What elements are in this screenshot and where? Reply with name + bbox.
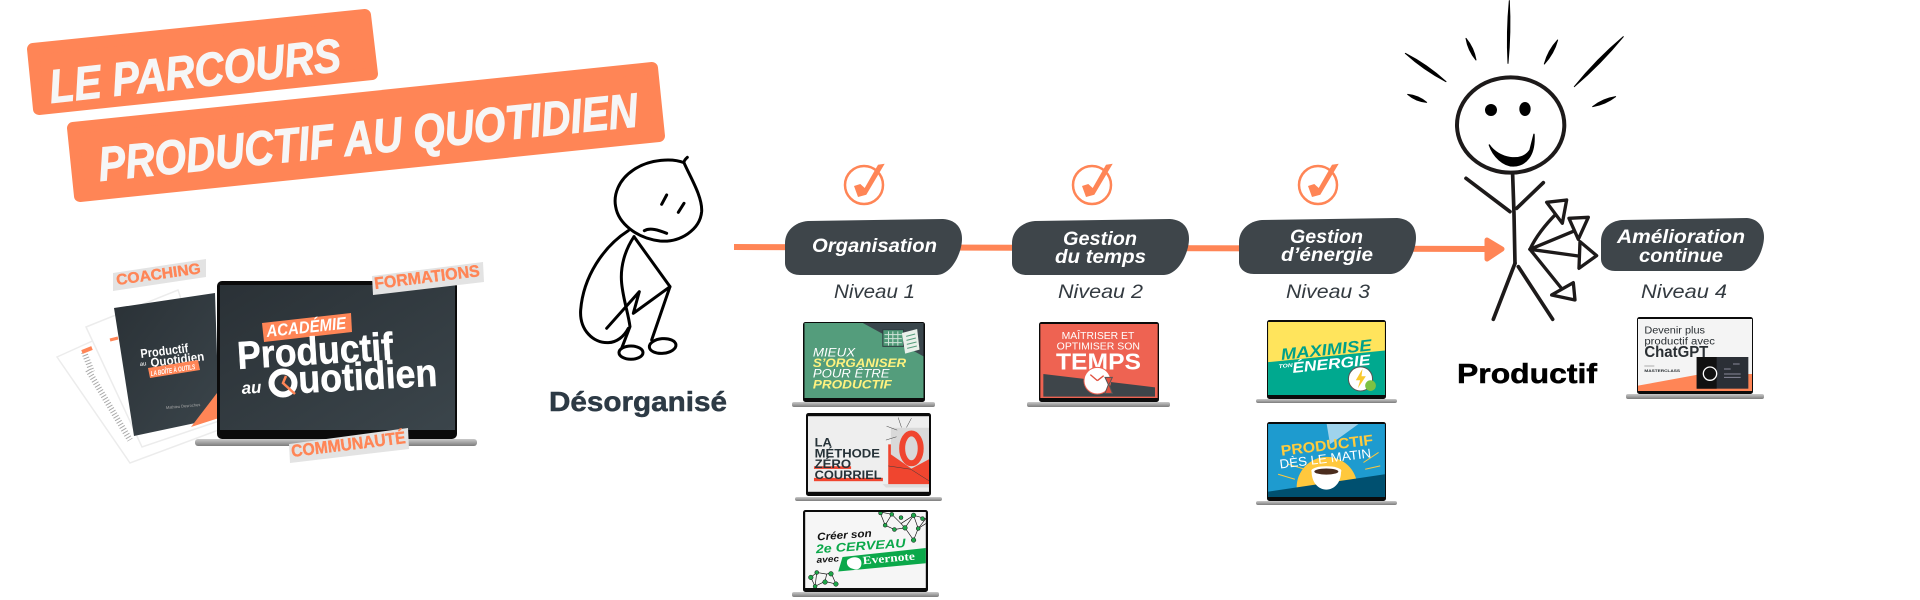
title banner: Le parcours: LE PARCOURS [46, 28, 343, 113]
book: la boîte à outils: Quotidien [150, 350, 205, 370]
book: la boîte à outils: Productif [140, 341, 190, 361]
laptop: Mieux s'organiser: MIEUX [813, 345, 856, 359]
pill: Gestion du temps: du temps [1055, 247, 1146, 268]
tag: communauté: COMMUNAUTÉ [290, 428, 407, 461]
academy mockup: papers, book, laptop and tags [57, 259, 484, 463]
laptop [195, 281, 477, 446]
academy badge: ACADÉMIE [265, 314, 348, 341]
happy figure drawing [1405, 1, 1623, 319]
improvement arrows [1530, 200, 1597, 300]
laptop: La méthode Zéro Courriel: LA [815, 436, 832, 450]
book: la boîte à outils: au [140, 361, 147, 368]
laptop: Maximise ton énergie: TON [1278, 363, 1293, 370]
label: Désorganisé: Désorganisé [549, 386, 727, 417]
head and face [1457, 77, 1564, 173]
laptop: Maîtriser et optimiser son temps: OPTIMISER SON [1057, 341, 1140, 352]
step 3: Gestion d'énergie [1239, 164, 1416, 303]
label: Niveau 2: Niveau 2 [1058, 282, 1143, 303]
laptop: La méthode Zéro Courriel: MÉTHODE [815, 445, 880, 460]
happy stick figure: Productif [1405, 1, 1623, 389]
pill: Gestion d'énergie [1239, 218, 1416, 274]
laptop: Maximise ton énergie: ÉNERGIE [1291, 352, 1373, 377]
laptop: Créer son 2e cerveau avec Evernote: avec [816, 553, 840, 565]
laptop: Maximise ton énergie: MAXIMISE [1280, 336, 1374, 364]
title: Le parcours Productif au quotidien [33, 15, 659, 196]
laptop: Productif dès le matin: PRODUCTIF [1280, 433, 1374, 460]
laptop: Maîtriser et optimiser son temps [1027, 322, 1170, 407]
tag: coaching: COACHING [115, 260, 202, 289]
laptop: Maîtriser et optimiser son temps: TEMPS [1056, 348, 1141, 374]
body and limbs [1466, 175, 1553, 319]
pill: Gestion du temps [1012, 219, 1189, 275]
laptop: Maîtriser et optimiser son temps: MAÎTRISER ET [1062, 331, 1134, 342]
laptop: Créer son 2e cerveau avec Evernote: Evernote [862, 551, 915, 567]
laptop: Productif dès le matin [1256, 422, 1397, 505]
laptop: Maximise ton énergie [1256, 320, 1397, 403]
check icon [845, 164, 885, 204]
label: Niveau 1: Niveau 1 [834, 282, 915, 303]
book: la boîte à outils: Mathieu Desroches [166, 402, 200, 410]
laptop: La méthode Zéro Courriel: ZÉRO [815, 456, 852, 471]
label: Niveau 4: Niveau 4 [1641, 282, 1727, 303]
title banner: Productif au quotidien: PRODUCTIF AU QUOTIDIEN [96, 84, 641, 192]
laptop: Devenir plus productif avec ChatGPT: ChatGPT [1644, 344, 1709, 361]
step 4: Amélioration continue [1601, 218, 1764, 303]
laptop: Mieux s'organiser: PRODUCTIF [813, 377, 893, 391]
laptop: Créer son 2e cerveau avec Evernote: 2e CERVEAU [814, 536, 907, 556]
laptop title: au [241, 378, 263, 398]
tag: formations: FORMATIONS [373, 262, 481, 293]
laptop title: Productif [236, 325, 395, 378]
laptop: Mieux s'organiser: S’ORGANISER [813, 356, 907, 370]
label: Niveau 3: Niveau 3 [1286, 282, 1370, 303]
sad stick figure: Désorganisé [549, 157, 727, 417]
laptop: Productif dès le matin: DÈS LE MATIN [1279, 445, 1372, 472]
pill: Amélioration continue: Amélioration [1616, 227, 1745, 248]
laptop title: uotidien [297, 352, 438, 402]
timeline arrow [734, 240, 1502, 259]
laptop: Créer son 2e cerveau avec Evernote: Créer son [817, 528, 873, 543]
laptop: La méthode Zéro Courriel [795, 413, 942, 501]
pill: Organisation: Organisation [812, 236, 937, 257]
book: la boîte à outils [114, 293, 219, 436]
laptop: Devenir plus productif avec ChatGPT: productif avec [1644, 336, 1715, 347]
label: Productif: Productif [1457, 358, 1598, 389]
book: la boîte à outils: LA BOÎTE À OUTILS [150, 362, 196, 378]
laptop: Créer son 2e cerveau avec Evernote [792, 510, 939, 597]
pill: Gestion d'énergie: Gestion [1290, 227, 1363, 248]
check icon [1073, 164, 1113, 204]
laptop: Devenir plus productif avec ChatGPT: MASTERCLASS [1644, 368, 1680, 373]
pill: Gestion du temps: Gestion [1063, 229, 1137, 250]
laptop: Mieux s'organiser: POUR ÊTRE [813, 365, 891, 380]
step 2: Gestion du temps [1012, 164, 1189, 303]
check icon [1299, 164, 1339, 204]
pill: Amélioration continue: continue [1639, 246, 1723, 267]
papers [57, 290, 232, 463]
pill: Organisation [785, 219, 962, 275]
laptop: Devenir plus productif avec ChatGPT [1626, 317, 1764, 399]
laptop title [236, 325, 438, 402]
rays [1405, 1, 1623, 107]
laptop: La méthode Zéro Courriel: COURRIEL [815, 468, 882, 482]
step 1: Organisation [785, 164, 962, 303]
pill: Amélioration continue [1601, 218, 1764, 271]
pill: Gestion d'énergie: d’énergie [1281, 245, 1373, 266]
laptop: Mieux s'organiser [792, 322, 935, 407]
laptop: Devenir plus productif avec ChatGPT: Devenir plus [1644, 326, 1705, 337]
sad figure drawing [581, 157, 702, 359]
